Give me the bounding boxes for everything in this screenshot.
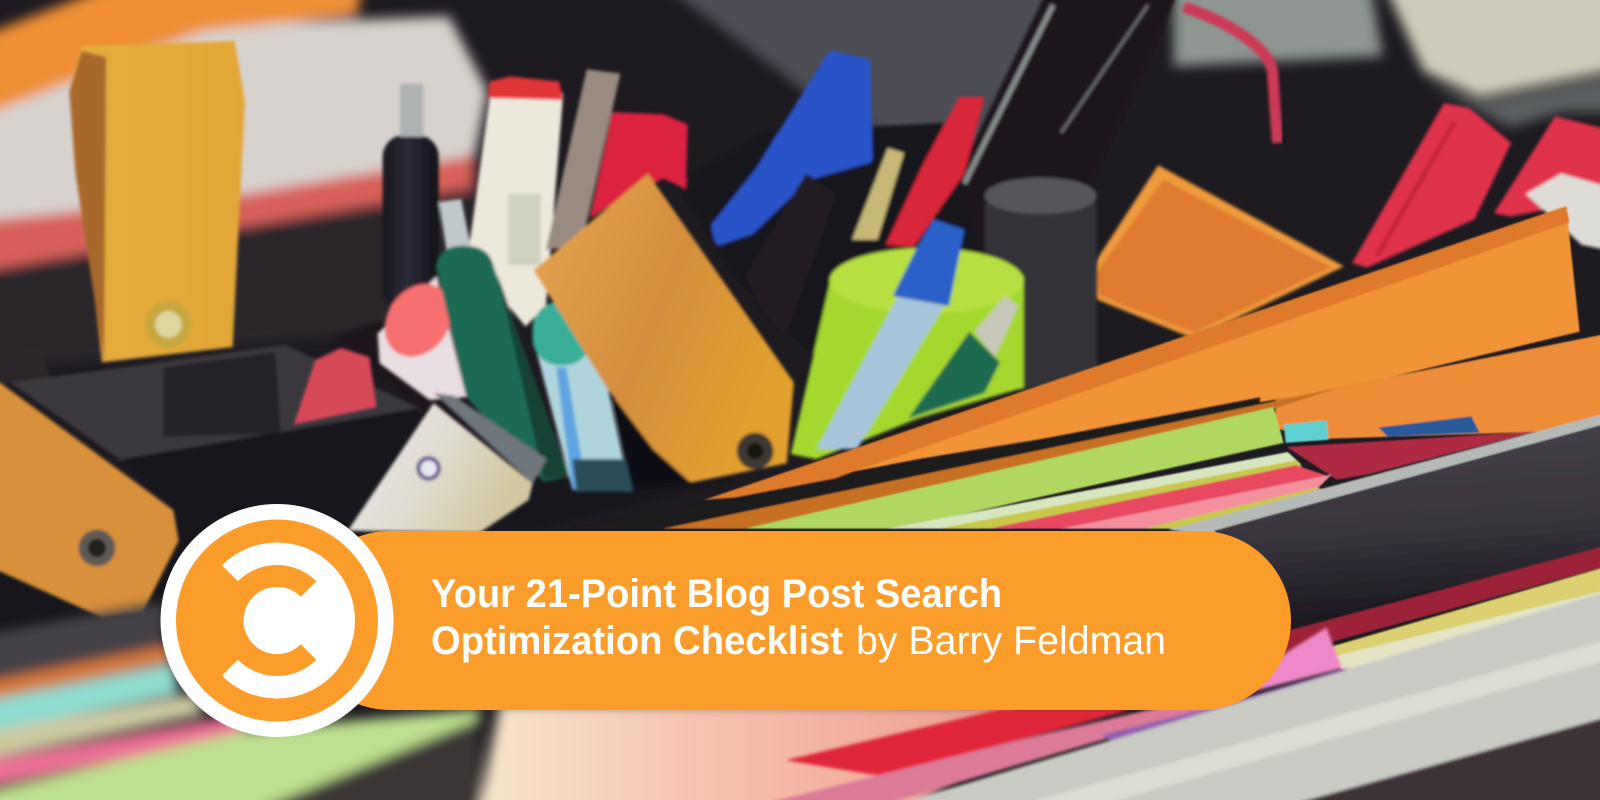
banner: orange title bar (300, 531, 1291, 710)
pens and markers in the centre (294, 0, 1189, 533)
organiser trays (0, 321, 735, 638)
orange leather strap bottom-left (0, 383, 179, 617)
stacked coloured paper (571, 206, 1600, 673)
grey-white box lower right (857, 584, 1600, 800)
title text: Optimization Checklist (431, 619, 843, 663)
blurred foreground paper bands (0, 602, 1020, 800)
title text (431, 572, 1166, 663)
title text: Your 21-Point Blog Post Search (431, 572, 1002, 616)
icon: C logo in a circle (160, 504, 394, 737)
red string on the back box (1184, 7, 1278, 143)
red markers top right (1352, 103, 1600, 267)
yellow leather strap top-left (69, 41, 245, 362)
black pens group (949, 0, 1189, 255)
red and pink sheets bottom (714, 628, 1347, 800)
title text: by Barry Feldman (856, 619, 1166, 663)
blurred back of the organiser (0, 0, 1600, 372)
orange notepad at the back (1088, 165, 1344, 339)
